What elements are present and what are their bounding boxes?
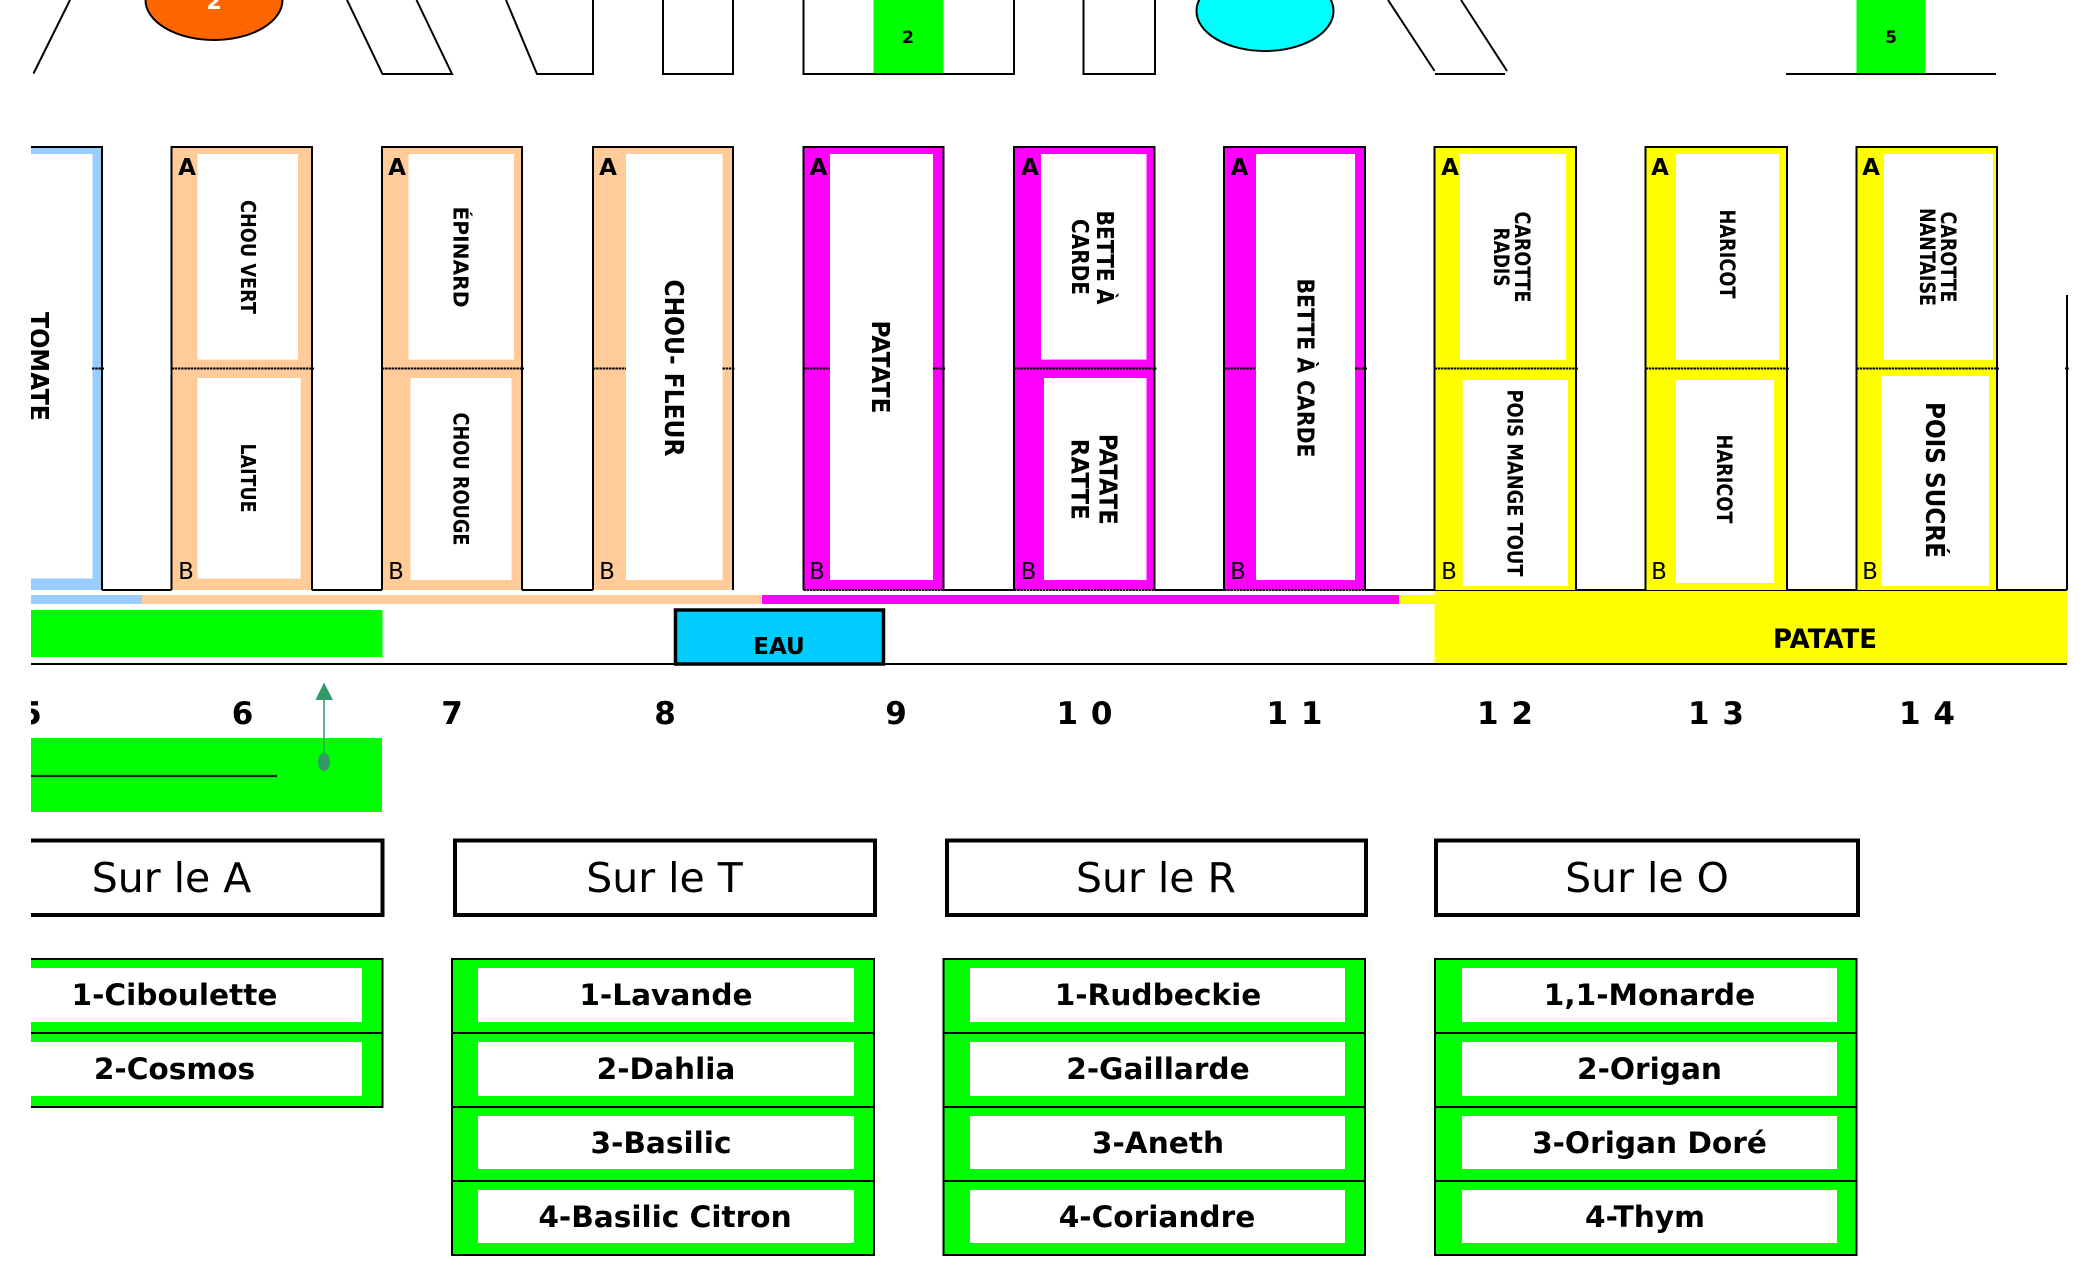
rectangular plot right — [1084, 0, 1155, 74]
bed 13: haricot, haricot: HARICOT — [1715, 210, 1739, 299]
heading: Sur le A — [20, 840, 382, 915]
list: plants on A — [20, 959, 382, 1107]
list: plants on O: 3-Origan Doré — [1532, 1126, 1767, 1160]
bed 13: haricot, haricot: HARICOT — [1712, 434, 1736, 524]
bed 14: carotte nantaise, pois sucré: POIS SUCRÉ — [1919, 402, 1951, 558]
bed 10: bette à carde, patate ratte: PATATE — [1093, 434, 1122, 525]
row numbers: 1 2 — [1477, 696, 1533, 732]
bed 9: patate: B — [809, 559, 825, 585]
bed 10: bette à carde, patate ratte: CARDE — [1066, 219, 1092, 295]
bed 6: chou vert, laitue: LAITUE — [236, 444, 260, 512]
bed 6: chou vert, laitue: B — [178, 559, 194, 585]
yellow block: PATATE — [1434, 591, 2067, 663]
heading: Sur le R: Sur le R — [1076, 854, 1236, 902]
list: plants on R: 4-Coriandre — [1059, 1200, 1255, 1234]
wide plot with green strip 2: 2 — [902, 28, 914, 48]
cyan circle — [1196, 0, 1334, 51]
horizontal base line — [31, 663, 2067, 665]
row numbers — [31, 700, 1954, 724]
bed 12: carotte radis, pois mange tout: CAROTTE — [1510, 212, 1534, 302]
heading: Sur le T — [455, 840, 875, 915]
list: plants on R: 3-Aneth — [1092, 1126, 1224, 1160]
list: plants on T: 1-Lavande — [579, 978, 753, 1012]
bed 11: bette à carde: B — [1230, 559, 1246, 585]
bed 10: bette à carde, patate ratte: B — [1021, 559, 1036, 585]
bed 10: bette à carde, patate ratte: RATTE — [1066, 439, 1095, 520]
rectangular plot — [663, 0, 733, 74]
bed 10: bette à carde, patate ratte: A — [1021, 155, 1039, 181]
bed 9: patate: A — [810, 155, 828, 181]
row numbers: 8 — [654, 696, 676, 732]
bed 6: chou vert, laitue: A — [178, 155, 196, 181]
slanted plot — [506, 0, 593, 74]
bed 11: bette à carde: A — [1231, 155, 1249, 181]
row numbers: 1 3 — [1688, 696, 1744, 732]
row numbers: 6 — [232, 696, 253, 732]
heading: Sur le A: Sur le A — [92, 854, 251, 902]
list: plants on R: 2-Gaillarde — [1066, 1052, 1250, 1086]
bed 10: bette à carde, patate ratte: BETTE À — [1091, 210, 1119, 305]
list: plants on O: 4-Thym — [1585, 1200, 1705, 1234]
list: plants on O — [1435, 959, 1856, 1255]
bed 8: chou-fleur: B — [599, 559, 615, 585]
base line with green strip 5: 5 — [1885, 28, 1897, 48]
water box: EAU — [676, 610, 884, 664]
bed 5: tomate: TOMATE — [23, 312, 53, 421]
bed 14: carotte nantaise, pois sucré: CAROTTE — [1936, 212, 1960, 302]
colour strip under beds — [31, 595, 1435, 604]
bed 8: chou-fleur — [593, 147, 735, 590]
row numbers: 1 0 — [1057, 696, 1112, 732]
top row of garden shapes — [34, 0, 1996, 74]
list: plants on R: 1-Rudbeckie — [1055, 978, 1261, 1012]
bed 7: épinard, chou rouge — [382, 147, 524, 590]
bed 10: bette à carde, patate ratte — [1014, 147, 1156, 590]
row numbers: 1 4 — [1899, 696, 1955, 732]
heading: Sur le R — [947, 840, 1366, 915]
green compost block with line — [31, 738, 382, 812]
list: plants on T — [452, 959, 874, 1255]
bed 14: carotte nantaise, pois sucré: A — [1862, 155, 1880, 181]
bed 8: chou-fleur: A — [599, 155, 617, 181]
row numbers: 9 — [885, 696, 907, 732]
bed 12: carotte radis, pois mange tout: RADIS — [1489, 228, 1513, 286]
heading: Sur le O: Sur le O — [1565, 854, 1729, 902]
heading: Sur le T: Sur le T — [586, 854, 744, 902]
yellow block: PATATE: PATATE — [1773, 624, 1877, 655]
bed 9: patate: PATATE — [866, 320, 895, 414]
bed 6: chou vert, laitue — [172, 147, 314, 590]
bed 14: carotte nantaise, pois sucré: NANTAISE — [1915, 208, 1939, 306]
bed base connecting lines — [102, 295, 2067, 590]
water box: EAU: EAU — [753, 634, 805, 660]
bed 11: bette à carde: BETTE À CARDE — [1291, 278, 1319, 458]
base line with green strip 5 — [1786, 0, 1996, 74]
bed 12: carotte radis, pois mange tout: A — [1441, 155, 1459, 181]
bed 7: épinard, chou rouge: CHOU ROUGE — [449, 412, 473, 546]
list: plants on T: 4-Basilic Citron — [538, 1200, 792, 1234]
list: plants on T: 2-Dahlia — [597, 1052, 735, 1086]
wide plot with green strip 2 — [804, 0, 1014, 74]
diagonal left edge — [34, 0, 70, 74]
green bar — [31, 610, 382, 657]
bed 6: chou vert, laitue: CHOU VERT — [236, 200, 260, 314]
bed 13: haricot, haricot: B — [1651, 559, 1667, 585]
list: plants on R — [944, 959, 1365, 1255]
arrow: north marker — [316, 682, 333, 771]
bed 14: carotte nantaise, pois sucré: B — [1862, 559, 1878, 585]
row numbers: 7 — [441, 696, 463, 732]
bed 11: bette à carde — [1224, 147, 1367, 590]
bed 7: épinard, chou rouge: ÉPINARD — [448, 206, 473, 308]
bed 13: haricot, haricot: A — [1651, 155, 1669, 181]
list: plants on A: 2-Cosmos — [94, 1052, 255, 1086]
row numbers: 5 — [20, 696, 42, 732]
bed 7: épinard, chou rouge: B — [388, 559, 404, 585]
bed 14: carotte nantaise, pois sucré — [1856, 147, 2069, 590]
list: plants on A: 1-Ciboulette — [72, 978, 277, 1012]
bed 8: chou-fleur: CHOU- FLEUR — [658, 280, 688, 456]
parallelogram plot — [347, 0, 452, 74]
bed 12: carotte radis, pois mange tout: B — [1441, 559, 1457, 585]
bed 12: carotte radis, pois mange tout — [1434, 147, 1578, 590]
list: plants on O: 1,1-Monarde — [1544, 978, 1755, 1012]
bed 12: carotte radis, pois mange tout: POIS MANGE TOUT — [1503, 390, 1527, 577]
bed 5: tomate — [31, 146, 104, 590]
row numbers: 1 1 — [1267, 696, 1322, 732]
heading: Sur le O — [1436, 840, 1858, 915]
bed 13: haricot, haricot — [1646, 147, 1789, 590]
bed 9: patate — [804, 147, 946, 590]
slanted open plot — [1388, 0, 1507, 74]
bed 7: épinard, chou rouge: A — [388, 155, 406, 181]
list: plants on O: 2-Origan — [1577, 1052, 1722, 1086]
orange circle 2 — [146, 0, 282, 40]
list: plants on T: 3-Basilic — [590, 1126, 732, 1160]
